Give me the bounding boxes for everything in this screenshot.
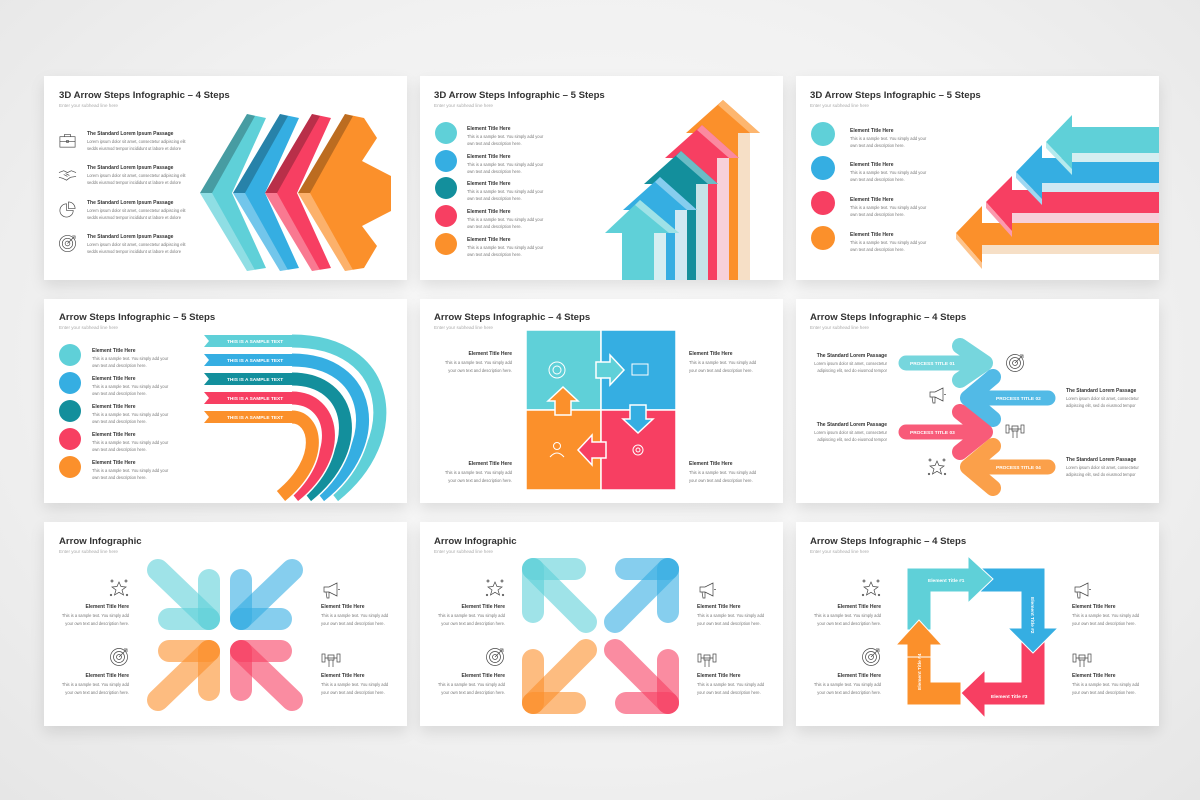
list items: The Standard Lorem Ipsum Passage <box>87 234 174 240</box>
subhead: Enter your subhead line here <box>810 103 869 108</box>
side texts: your own text and description here. <box>441 690 505 695</box>
cycle arrows <box>896 556 1058 718</box>
side texts: This is a sample text. You simply add <box>321 613 389 618</box>
panel: 3D arrow steps 5 left <box>796 76 1159 280</box>
panel: 3D arrow steps 4 <box>44 76 407 280</box>
list items: Lorem ipsum dolor sit amet, consectetur adipiscing elit <box>87 139 186 144</box>
side texts <box>445 351 757 483</box>
side texts: your own text and description here. <box>65 690 129 695</box>
list items <box>59 131 186 254</box>
arrow labels: PROCESS TITLE 01 <box>910 361 955 367</box>
side texts: Lorem ipsum dolor sit amet, consectetur <box>814 361 888 366</box>
list items: The Standard Lorem Ipsum Passage <box>87 131 174 137</box>
list: own text and description here. <box>92 419 147 424</box>
curved bands: THIS IS A SAMPLE TEXT <box>227 377 283 383</box>
list: This is a sample text. You simply add your <box>467 134 544 139</box>
list: own text and description here. <box>92 475 147 480</box>
title: Arrow Steps Infographic – 4 Steps <box>434 312 590 323</box>
side texts: Element Title Here <box>1072 604 1116 610</box>
side texts: This is a sample text. You simply add <box>1072 613 1140 618</box>
list items: The Standard Lorem Ipsum Passage <box>87 200 174 206</box>
panel: square cycle arrows <box>796 522 1159 726</box>
list: This is a sample text. You simply add your <box>92 356 169 361</box>
curved bands: THIS IS A SAMPLE TEXT <box>227 415 283 421</box>
title: 3D Arrow Steps Infographic – 5 Steps <box>810 90 981 101</box>
list: Element Title Here <box>92 460 136 466</box>
subhead: Enter your subhead line here <box>59 325 118 330</box>
list: own text and description here. <box>850 177 905 182</box>
side texts <box>62 580 389 695</box>
side texts: your own text and description here. <box>1072 690 1136 695</box>
title: Arrow Steps Infographic – 5 Steps <box>59 312 215 323</box>
side texts: This is a sample text. You simply add <box>689 360 757 365</box>
list: This is a sample text. You simply add your <box>92 412 169 417</box>
side texts: Element Title Here <box>321 604 365 610</box>
subhead: Enter your subhead line here <box>59 103 118 108</box>
list <box>811 122 927 252</box>
side texts: Element Title Here <box>461 673 505 679</box>
side texts: The Standard Lorem Passage <box>1066 457 1137 463</box>
side texts: This is a sample text. You simply add <box>438 682 506 687</box>
side texts: Element Title Here <box>697 604 741 610</box>
list: own text and description here. <box>467 252 522 257</box>
side texts: Element Title Here <box>468 461 512 467</box>
subhead: Enter your subhead line here <box>434 325 493 330</box>
arrows <box>906 346 1048 488</box>
list: own text and description here. <box>467 196 522 201</box>
list: This is a sample text. You simply add your <box>92 440 169 445</box>
curved bands: THIS IS A SAMPLE TEXT <box>227 358 283 364</box>
side texts: This is a sample text. You simply add <box>689 470 757 475</box>
list: Element Title Here <box>850 197 894 203</box>
chevron arrows <box>200 114 391 271</box>
side texts: your own text and description here. <box>697 690 761 695</box>
arrow labels: PROCESS TITLE 03 <box>910 430 955 436</box>
list: own text and description here. <box>92 391 147 396</box>
side texts: Lorem ipsum dolor sit amet, consectetur <box>1066 396 1139 401</box>
side texts: Element Title Here <box>321 673 365 679</box>
side texts: your own text and description here. <box>441 621 505 626</box>
cycle arrows: Element Title #3 <box>991 694 1028 700</box>
panel: arrow steps 5 curved <box>44 299 407 503</box>
arrow labels <box>910 361 1041 471</box>
list: Element Title Here <box>92 348 136 354</box>
side texts <box>814 353 1139 477</box>
side texts: The Standard Lorem Passage <box>817 422 887 428</box>
list: Element Title Here <box>92 432 136 438</box>
left arrows <box>956 115 1159 269</box>
side texts: adipiscing elit, sed do eiusmod tempor <box>1066 403 1136 408</box>
list <box>59 344 169 480</box>
side texts: your own text and description here. <box>448 368 512 373</box>
panel: zigzag arrows <box>796 299 1159 503</box>
title: Arrow Steps Infographic – 4 Steps <box>810 536 966 547</box>
list: own text and description here. <box>92 447 147 452</box>
list: Element Title Here <box>467 237 511 243</box>
side texts: Element Title Here <box>697 673 741 679</box>
side texts: your own text and description here. <box>817 621 881 626</box>
side texts: Lorem ipsum dolor sit amet, consectetur <box>814 430 888 435</box>
title: Arrow Infographic <box>59 536 142 547</box>
side texts: your own text and description here. <box>689 478 753 483</box>
list: own text and description here. <box>467 141 522 146</box>
subhead: Enter your subhead line here <box>810 549 869 554</box>
panel: arrow infographic outward <box>420 522 783 726</box>
side texts: your own text and description here. <box>65 621 129 626</box>
panel: 3D arrow steps 5 up <box>420 76 783 280</box>
list: This is a sample text. You simply add your <box>850 170 927 175</box>
list: This is a sample text. You simply add your <box>850 136 927 141</box>
side texts: This is a sample text. You simply add <box>62 613 130 618</box>
subhead: Enter your subhead line here <box>434 103 493 108</box>
list: own text and description here. <box>850 212 905 217</box>
side texts: Element Title Here <box>689 351 733 357</box>
side texts: your own text and description here. <box>321 690 385 695</box>
list: Element Title Here <box>92 404 136 410</box>
side texts: your own text and description here. <box>817 690 881 695</box>
side texts: Element Title Here <box>1072 673 1116 679</box>
list: Element Title Here <box>467 181 511 187</box>
puzzle square <box>526 330 676 490</box>
cycle arrows: Element Title #4 <box>917 653 923 690</box>
arrow labels: PROCESS TITLE 04 <box>996 465 1041 471</box>
side texts: This is a sample text. You simply add <box>697 613 765 618</box>
side texts: This is a sample text. You simply add <box>438 613 506 618</box>
list: This is a sample text. You simply add your <box>850 205 927 210</box>
list items: sedds eiusmod tempor incididunt ut labore et dolore <box>87 215 182 220</box>
list: This is a sample text. You simply add your <box>467 245 544 250</box>
side texts: Element Title Here <box>85 673 129 679</box>
subhead: Enter your subhead line here <box>434 549 493 554</box>
four inward arrows <box>158 570 292 700</box>
side texts: Element Title Here <box>461 604 505 610</box>
side texts <box>814 580 1140 695</box>
curved bands: THIS IS A SAMPLE TEXT <box>227 396 283 402</box>
panel: puzzle arrows <box>420 299 783 503</box>
list: own text and description here. <box>467 224 522 229</box>
list: This is a sample text. You simply add your <box>467 189 544 194</box>
cycle arrows: Element Title #2 <box>1029 597 1035 634</box>
side texts: adipiscing elit, sed do eiusmod tempor <box>1066 472 1136 477</box>
side texts: Element Title Here <box>837 673 881 679</box>
list items: Lorem ipsum dolor sit amet, consectetur adipiscing elit <box>87 208 186 213</box>
icons <box>928 354 1024 475</box>
list: Element Title Here <box>850 128 894 134</box>
list: own text and description here. <box>467 169 522 174</box>
list items: Lorem ipsum dolor sit amet, consectetur adipiscing elit <box>87 173 186 178</box>
list: Element Title Here <box>467 154 511 160</box>
side texts: Lorem ipsum dolor sit amet, consectetur <box>1066 465 1139 470</box>
side texts: your own text and description here. <box>689 368 753 373</box>
four outward arrows <box>533 569 668 703</box>
side texts: The Standard Lorem Passage <box>817 353 887 359</box>
cycle arrows: Element Title #1 <box>928 578 965 584</box>
list items: sedds eiusmod tempor incididunt ut labore et dolore <box>87 146 182 151</box>
side texts: This is a sample text. You simply add <box>445 360 513 365</box>
up arrows <box>605 100 760 280</box>
side texts: This is a sample text. You simply add <box>445 470 513 475</box>
side texts: Element Title Here <box>85 604 129 610</box>
side texts: your own text and description here. <box>321 621 385 626</box>
list: Element Title Here <box>850 162 894 168</box>
side texts <box>438 580 765 695</box>
side texts: This is a sample text. You simply add <box>697 682 765 687</box>
list: own text and description here. <box>850 143 905 148</box>
list items: Lorem ipsum dolor sit amet, consectetur adipiscing elit <box>87 242 186 247</box>
list: This is a sample text. You simply add your <box>92 468 169 473</box>
list: Element Title Here <box>467 209 511 215</box>
title: 3D Arrow Steps Infographic – 5 Steps <box>434 90 605 101</box>
curved bands: THIS IS A SAMPLE TEXT <box>227 339 283 345</box>
side texts: This is a sample text. You simply add <box>62 682 130 687</box>
panel: arrow infographic inward <box>44 522 407 726</box>
side texts: This is a sample text. You simply add <box>1072 682 1140 687</box>
side texts: your own text and description here. <box>697 621 761 626</box>
title: Arrow Infographic <box>434 536 517 547</box>
side texts: This is a sample text. You simply add <box>814 682 882 687</box>
list items: The Standard Lorem Ipsum Passage <box>87 165 174 171</box>
side texts: your own text and description here. <box>1072 621 1136 626</box>
title: Arrow Steps Infographic – 4 Steps <box>810 312 966 323</box>
list: This is a sample text. You simply add your <box>850 240 927 245</box>
subhead: Enter your subhead line here <box>59 549 118 554</box>
list: This is a sample text. You simply add your <box>92 384 169 389</box>
list: own text and description here. <box>850 247 905 252</box>
curved bands <box>204 335 380 496</box>
side texts: adipiscing elit, sed do eiusmod tempor <box>817 368 888 373</box>
list: own text and description here. <box>92 363 147 368</box>
side texts: This is a sample text. You simply add <box>321 682 389 687</box>
list: Element Title Here <box>850 232 894 238</box>
list: This is a sample text. You simply add your <box>467 162 544 167</box>
side texts: The Standard Lorem Passage <box>1066 388 1137 394</box>
list <box>435 122 544 257</box>
side texts: Element Title Here <box>468 351 512 357</box>
side texts: This is a sample text. You simply add <box>814 613 882 618</box>
side texts: your own text and description here. <box>448 478 512 483</box>
side texts: Element Title Here <box>837 604 881 610</box>
side texts: Element Title Here <box>689 461 733 467</box>
subhead: Enter your subhead line here <box>810 325 869 330</box>
side texts: adipiscing elit, sed do eiusmod tempor <box>817 437 888 442</box>
arrow labels: PROCESS TITLE 02 <box>996 396 1041 402</box>
list: This is a sample text. You simply add your <box>467 217 544 222</box>
list: Element Title Here <box>467 126 511 132</box>
title: 3D Arrow Steps Infographic – 4 Steps <box>59 90 230 101</box>
list: Element Title Here <box>92 376 136 382</box>
list items: sedds eiusmod tempor incididunt ut labore et dolore <box>87 249 182 254</box>
list items: sedds eiusmod tempor incididunt ut labore et dolore <box>87 180 182 185</box>
